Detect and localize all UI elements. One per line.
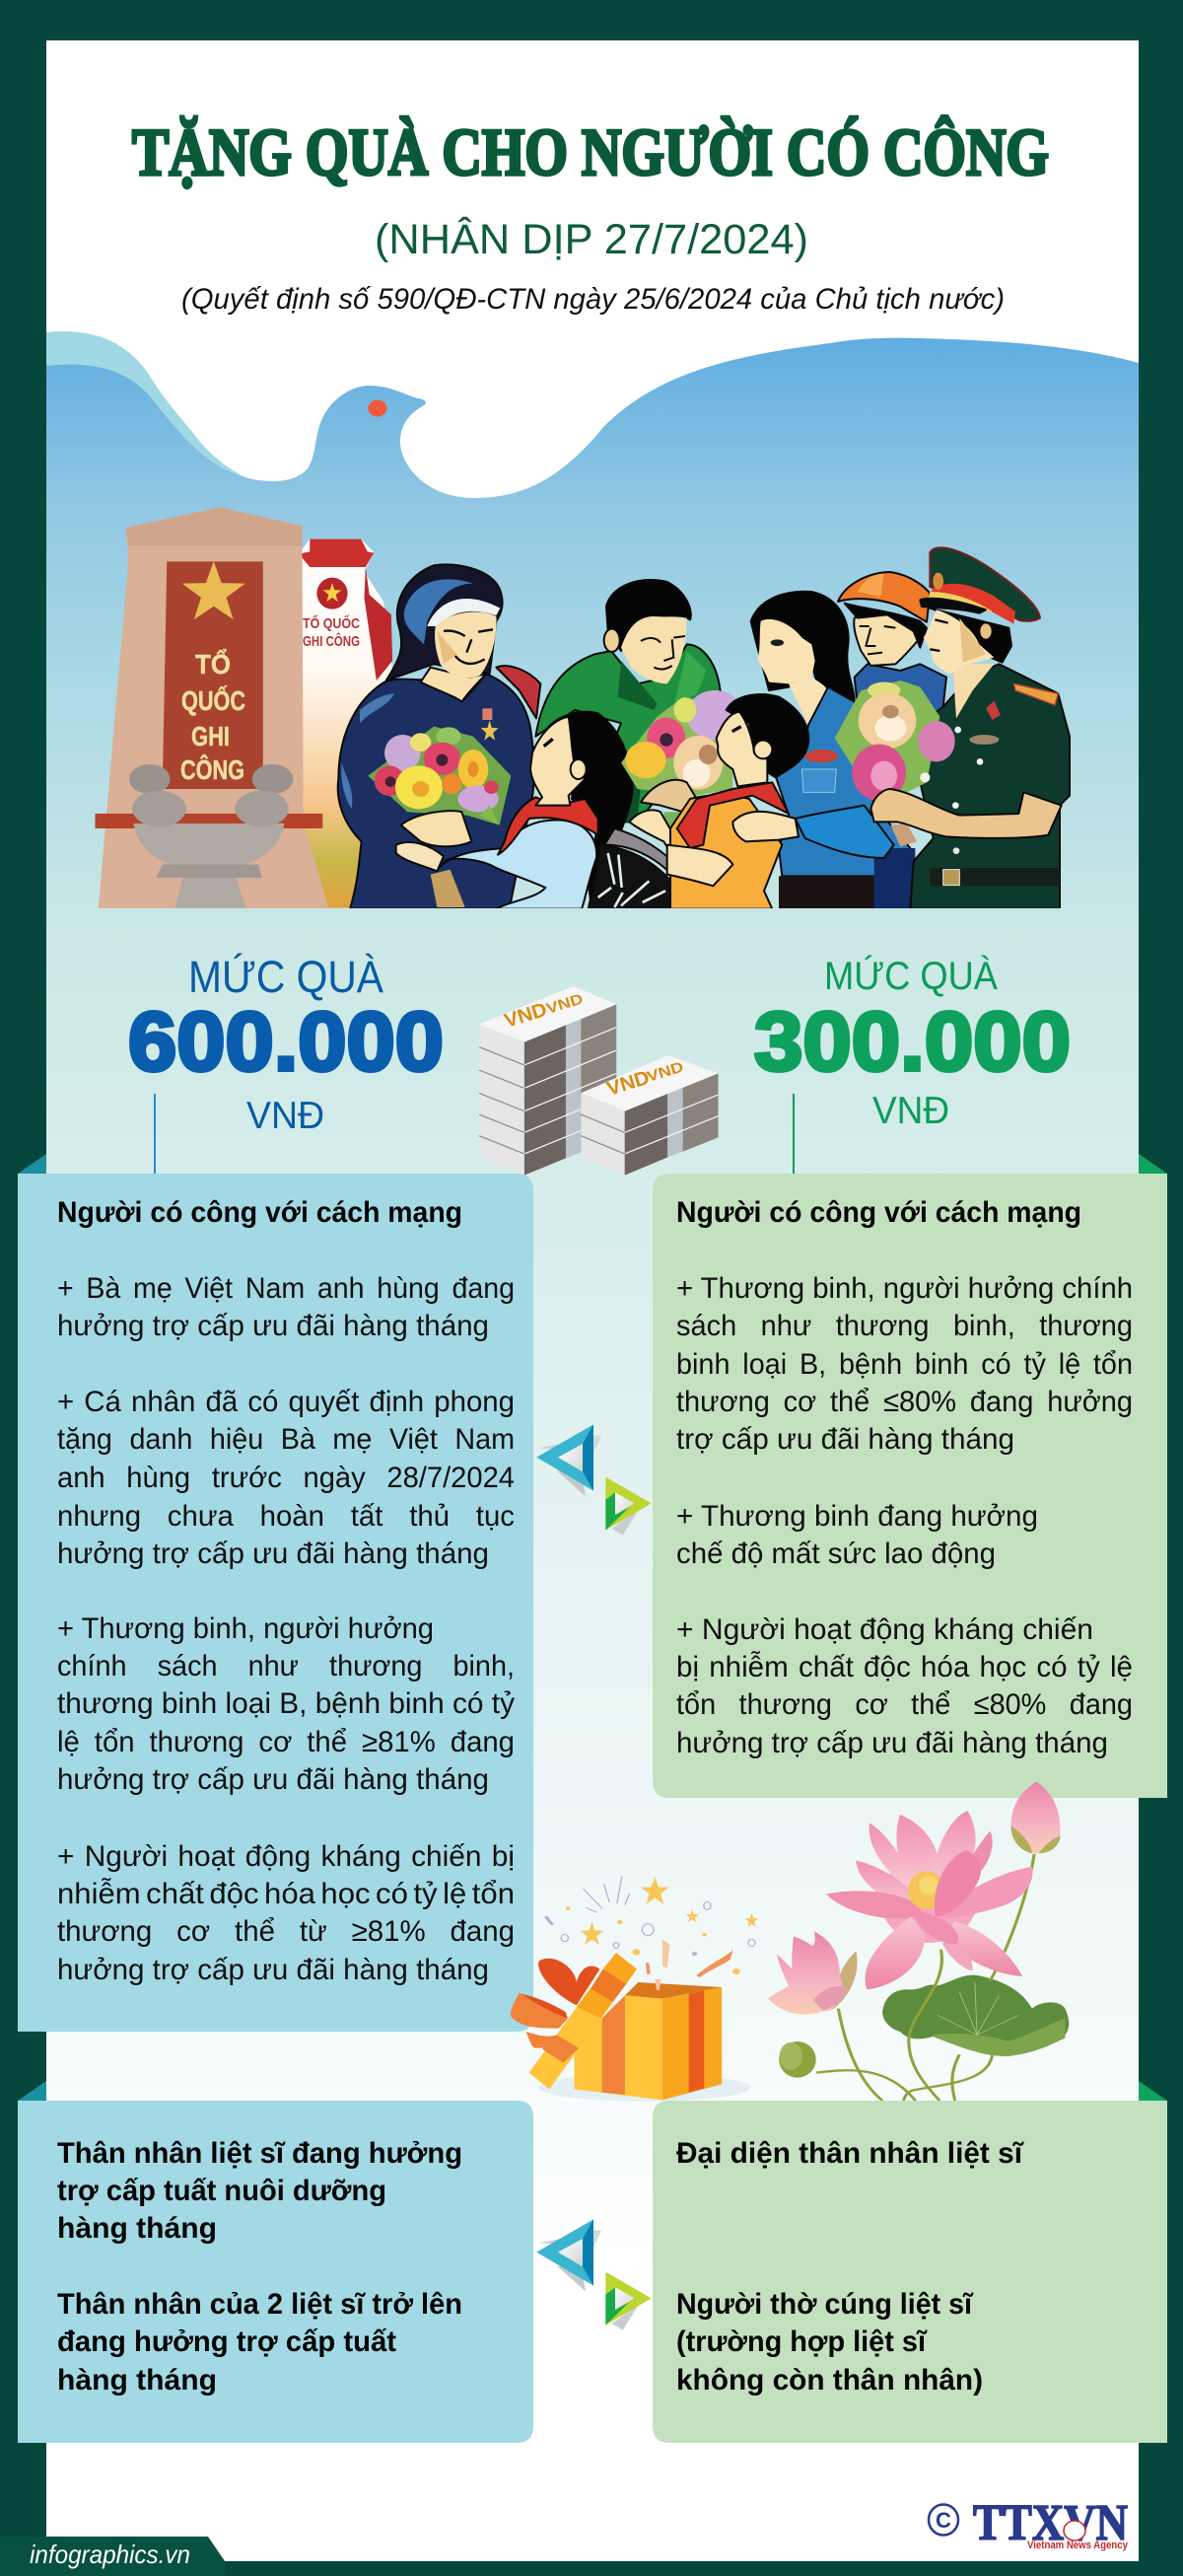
- fold corners of lower panels: [18, 2081, 1167, 2101]
- gift amount: 300.000 VND: VNĐ: [872, 1090, 949, 1132]
- worker with helmet: [837, 571, 947, 711]
- recipient group 3: chính sách như thương binh,: [57, 1650, 515, 1682]
- stele inscription: [180, 649, 245, 785]
- gift amount: 600.000 VND: MỨC QUÀ: [188, 952, 383, 1002]
- TTXVN logo: [929, 2495, 1129, 2551]
- footer band with site name: infographics.vn: [30, 2540, 190, 2569]
- gift amount: 300.000 VND: [754, 954, 1071, 1174]
- recipient group 3: tổn thương cơ thể ≤80% đang: [676, 1688, 1133, 1721]
- recipient group 2: hưởng trợ cấp ưu đãi hàng tháng: [57, 1538, 489, 1570]
- lotus seed pod: [779, 2041, 816, 2078]
- panel: 600.000 recipients: [18, 1174, 533, 2032]
- gift amount: 300.000 VND: MỨC QUÀ: [824, 954, 998, 998]
- recipient group 1: trợ cấp ưu đãi hàng tháng: [676, 1423, 1014, 1456]
- recipient group 2: tặng danh hiệu Bà mẹ Việt Nam: [57, 1423, 515, 1456]
- recipient group 2: [57, 1386, 515, 1570]
- text block: relatives of two or more martyrs: [57, 2288, 462, 2397]
- recipient group 2: [676, 1500, 1038, 1570]
- recipient group 4: hưởng trợ cấp ưu đãi hàng tháng: [57, 1954, 489, 1986]
- recipient group 3: lệ tổn thương cơ thể ≥81% đang: [57, 1726, 515, 1758]
- text block: relatives receiving monthly support: hàng tháng: [57, 2212, 217, 2245]
- text block: worshipper of martyr: không còn thân nhân): [676, 2364, 983, 2397]
- stele inscription: CÔNG: [180, 753, 244, 785]
- illustration: lotus flowers and leaf: [768, 1782, 1069, 2101]
- arrows between lower panels: [536, 2219, 652, 2330]
- recipient group 2: chế độ mất sức lao động: [676, 1538, 996, 1570]
- text block: worshipper of martyr: Người thờ cúng liệt sĩ: [676, 2288, 974, 2321]
- bouquet: grandmother: [368, 727, 511, 825]
- lotus stems: [816, 1854, 1034, 2101]
- dove eye: [369, 400, 386, 416]
- text block: worshipper of martyr: [676, 2288, 983, 2397]
- panel heading: Người có công với cách mạng: [57, 1196, 462, 1229]
- lotus leaf: [882, 1975, 1069, 2056]
- wheelchair wheel: [588, 829, 669, 908]
- text block: relatives of two or more martyrs: Thân nhân của 2 liệt sĩ trở lên: [57, 2288, 462, 2321]
- soldier: [910, 547, 1070, 909]
- small memorial inscription: GHI CÔNG: [303, 632, 360, 650]
- decision reference line: (Quyết định số 590/QĐ-CTN ngày 25/6/2024 của Chủ tịch nước): [181, 283, 1005, 316]
- gift amount: 600.000 VND: 600.000: [128, 995, 444, 1088]
- small memorial behind: [299, 539, 397, 908]
- recipient group 3: hưởng trợ cấp ưu đãi hàng tháng: [676, 1727, 1108, 1759]
- left group of figures: [338, 565, 742, 909]
- right group of figures: [667, 547, 1070, 909]
- recipient group 4: [57, 1840, 515, 1986]
- recipient group 3: bị nhiễm chất độc hóa học có tỷ lệ: [676, 1651, 1133, 1683]
- hero medal: [481, 708, 499, 741]
- icon: stacks of banknotes: VND: [604, 1067, 653, 1101]
- top-right lotus bud: [1010, 1782, 1061, 1853]
- text block: representative of relatives: Đại diện thân nhân liệt sĩ: [676, 2137, 1024, 2170]
- hands holding bouquet: [396, 811, 471, 871]
- recipient group 3: + Người hoạt động kháng chiến: [676, 1613, 1093, 1646]
- panel heading: Người có công với cách mạng: [676, 1196, 1081, 1229]
- recipient group 1: + Thương binh, người hưởng chính: [676, 1272, 1133, 1305]
- recipient group 1: hưởng trợ cấp ưu đãi hàng tháng: [57, 1310, 489, 1342]
- recipient group 1: + Bà mẹ Việt Nam anh hùng đang: [57, 1272, 515, 1305]
- text block: worshipper of martyr: (trường hợp liệt sĩ: [676, 2326, 928, 2358]
- gift amount: 600.000 VND: VNĐ: [246, 1095, 324, 1137]
- recipient group 3: thương binh loại B, bệnh binh có tỷ: [57, 1687, 515, 1720]
- recipient group 1: [676, 1272, 1133, 1456]
- recipient group 4: thương cơ thể từ ≥81% đang: [57, 1915, 515, 1948]
- dove-shaped sky background: [46, 331, 1139, 2561]
- recipient group 1: [57, 1272, 515, 1342]
- left lotus bud: [768, 1931, 857, 2015]
- text block: relatives of two or more martyrs: đang hưởng trợ cấp tuất: [57, 2326, 396, 2358]
- girl with red scarf: [431, 712, 633, 909]
- recipient group 1: thương cơ thể ≤80% đang hưởng: [676, 1386, 1133, 1418]
- text block: relatives receiving monthly support: Thân nhân liệt sĩ đang hưởng: [57, 2137, 462, 2170]
- recipient group 2: anh hùng trước ngày 28/7/2024: [57, 1462, 515, 1494]
- subtitle: (NHÂN DỊP 27/7/2024): [375, 216, 808, 263]
- icon: stacks of banknotes: VND: [502, 999, 550, 1033]
- icon: stacks of banknotes: VND: [544, 990, 586, 1018]
- fold corners of upper panels: [18, 1154, 1167, 1174]
- soldier's arm and hand: [870, 789, 1062, 838]
- TTXVN logo: C: [936, 2508, 951, 2533]
- gift amount: 300.000 VND: 300.000: [754, 995, 1071, 1088]
- hands on centre bouquet: [628, 779, 696, 847]
- panel: martyrs' relatives, 600.000: [18, 2101, 533, 2443]
- illustration: open gift box with confetti: [511, 1877, 758, 2102]
- boy in yellow: [667, 694, 808, 909]
- TTXVN logo: TTXVN: [973, 2495, 1128, 2551]
- recipient group 3: hưởng trợ cấp ưu đãi hàng tháng: [57, 1763, 489, 1796]
- stele inscription: TỔ: [195, 649, 231, 680]
- recipient group 2: + Cá nhân đã có quyết định phong: [57, 1386, 515, 1418]
- recipient group 1: sách như thương binh, thương: [676, 1310, 1133, 1342]
- panel: martyrs' relatives, 300.000: [653, 2101, 1167, 2443]
- recipient group 1: binh loại B, bệnh binh có tỷ lệ tổn: [676, 1348, 1133, 1381]
- main lotus flower: [826, 1811, 1033, 1989]
- footer band with site name: [0, 2537, 1183, 2576]
- bouquet: centre: [621, 690, 735, 826]
- man in green in wheelchair: [535, 580, 727, 822]
- recipient group 2: nhưng chưa hoàn tất thủ tục: [57, 1500, 515, 1533]
- grandmother figure: [338, 565, 540, 909]
- stele inscription: QUỐC: [181, 684, 245, 716]
- illustration: memorial stele and people with bouquets: [95, 507, 1070, 909]
- stele inscription: GHI: [191, 721, 230, 751]
- text block: relatives receiving monthly support: trợ cấp tuất nuôi dưỡng: [57, 2175, 386, 2207]
- main stele: [95, 507, 329, 909]
- small memorial inscription: TỔ QUỐC: [303, 614, 360, 632]
- icon: stacks of banknotes: [479, 986, 719, 1176]
- recipient group 2: + Thương binh đang hưởng: [676, 1500, 1038, 1533]
- text block: relatives of two or more martyrs: hàng tháng: [57, 2364, 217, 2397]
- icon: stacks of banknotes: VND: [645, 1058, 686, 1086]
- recipient group 3: + Thương binh, người hưởng: [57, 1612, 434, 1645]
- text block: relatives receiving monthly support: [57, 2137, 462, 2245]
- young woman in blue: [751, 592, 915, 909]
- arrows between upper panels: [536, 1424, 652, 1536]
- gift amount: 600.000 VND: [128, 952, 444, 1174]
- panel: 300.000 recipients: [653, 1174, 1167, 1798]
- recipient group 4: nhiễm chất độc hóa học có tỷ lệ tổn: [57, 1878, 515, 1910]
- small memorial inscription: [303, 615, 360, 646]
- recipient group 3: [57, 1612, 515, 1796]
- TTXVN logo: Vietnam News Agency: [1027, 2540, 1129, 2551]
- recipient group 4: + Người hoạt động kháng chiến bị: [57, 1840, 515, 1873]
- recipient group 3: [676, 1613, 1133, 1759]
- bouquet: soldier: [835, 680, 955, 846]
